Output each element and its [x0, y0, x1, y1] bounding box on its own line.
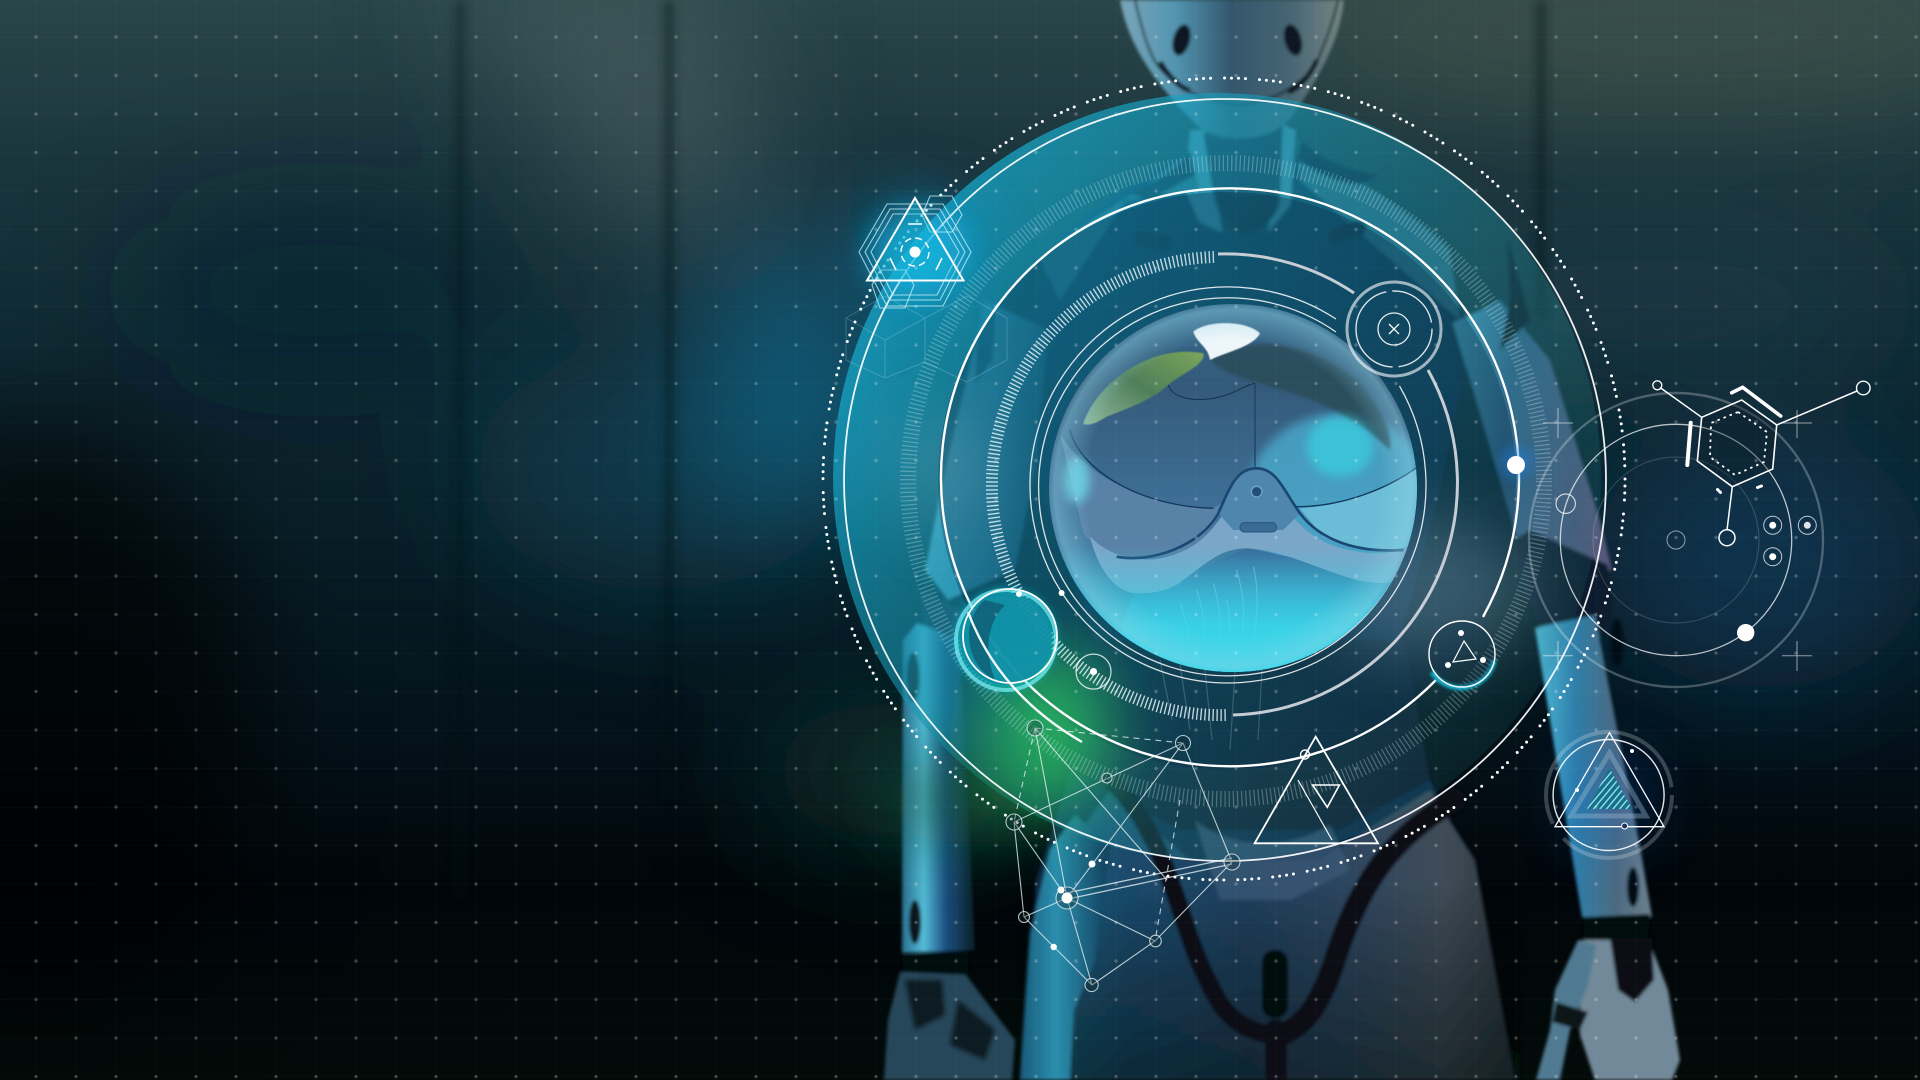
robot right upper arm: [1453, 300, 1612, 585]
right side light: [1248, 410, 1417, 558]
arc marker dots: [1016, 590, 1065, 597]
hexagon: [1697, 400, 1777, 487]
nose plate: [1218, 468, 1300, 530]
badge rings: [1546, 732, 1672, 858]
hexagons: [859, 196, 971, 308]
robot left forearm slots: [906, 652, 921, 944]
inner thin rings: [1030, 287, 1426, 683]
center target: [901, 238, 929, 266]
robot eyes: [1169, 22, 1305, 58]
robot belly slot: [1262, 950, 1288, 1018]
robot left thigh: [1020, 815, 1110, 1080]
robot jaw shadow: [1160, 60, 1317, 92]
large triangle icon: [1255, 737, 1378, 843]
nose dot: [1251, 486, 1262, 497]
robot left wrist: [903, 950, 968, 975]
robot right palm: [1610, 938, 1654, 1002]
robot shoulders: [1040, 140, 1460, 320]
robot belt plate: [1195, 820, 1350, 900]
inner ring shade: [938, 192, 1516, 770]
robot right forearm: [1535, 615, 1652, 917]
polar ice: [1193, 323, 1260, 360]
cyan cloud: [1307, 417, 1373, 477]
earth rim: [1049, 304, 1417, 672]
robot left forearm: [902, 623, 975, 953]
hair strands below globe: [1160, 660, 1262, 750]
robot left shoulder slot: [975, 257, 996, 385]
dotted ring: [823, 78, 1625, 880]
hatched triangle: [1587, 768, 1632, 809]
right triangle badge: [1546, 732, 1672, 858]
robot pelvis shade: [1020, 880, 1520, 1080]
small ring dot: [1076, 654, 1111, 689]
robot right thumb band: [1552, 1002, 1588, 1030]
robot head: [1120, 0, 1344, 138]
fur area: [1107, 548, 1417, 673]
network nodes: [1006, 720, 1240, 992]
robot neck lower: [1216, 190, 1280, 234]
mid triangle: [1571, 753, 1646, 816]
bright ring left: [956, 589, 1082, 742]
network bright dots: [1050, 860, 1096, 950]
robot left elbow: [920, 590, 1030, 690]
left lobe: [1060, 433, 1227, 559]
plus crosses: [1543, 408, 1812, 671]
robot straps: [1115, 785, 1455, 1080]
robot left upper arm: [925, 300, 1048, 600]
robot right elbow: [1505, 530, 1612, 650]
network constellation: [1006, 720, 1240, 992]
robot jaw line: [1135, 0, 1338, 105]
nose plate slot: [1240, 523, 1277, 532]
robot torso: [1020, 150, 1512, 1080]
dark land: [1210, 344, 1390, 450]
robot right shoulder slot: [1500, 240, 1530, 350]
tick marks: [890, 224, 942, 270]
double bonds: [1687, 423, 1691, 465]
robot right hand fingers: [1580, 938, 1680, 1080]
hex triangle icon: [859, 196, 971, 308]
earth globe: [1049, 304, 1433, 673]
white marker with blue glow: [1500, 445, 1534, 479]
badge dots: [1622, 823, 1628, 829]
robot chest dark patches: [1123, 140, 1378, 254]
lower light band: [1090, 516, 1407, 594]
triangle circle icon: [1429, 621, 1495, 688]
bottom glow: [1049, 304, 1417, 672]
faint cubes: [846, 296, 1007, 382]
molecule circles panel: [1529, 393, 1823, 687]
dark visor curve: [1117, 468, 1403, 558]
robot neck core: [1203, 125, 1283, 232]
target circle icon: [1347, 282, 1441, 376]
left lobe highlight: [1063, 457, 1090, 503]
robot figure: [884, 0, 1680, 1080]
robot pelvis: [1030, 790, 1515, 1080]
robot right wrist: [1583, 914, 1650, 940]
robot collar: [1185, 125, 1296, 232]
outer triangle: [1555, 733, 1664, 827]
helmet seams: [1070, 383, 1427, 508]
holographic disc: [833, 93, 1601, 861]
green land: [1083, 352, 1204, 425]
bonds: [1660, 388, 1857, 530]
small dashes: [1718, 486, 1762, 492]
middle white ring: [941, 188, 1519, 766]
colored glows: [870, 200, 1640, 845]
robot waist: [1070, 640, 1430, 830]
robot right thumb: [1536, 940, 1596, 1080]
tick ring: [908, 163, 1544, 799]
inner solid arcs: [1218, 254, 1457, 715]
end nodes: [1653, 381, 1662, 390]
robot left palm panel: [905, 980, 995, 1060]
triangle: [867, 198, 964, 280]
molecule: [1653, 381, 1870, 546]
robot left hand: [884, 972, 1015, 1080]
ring dots: [1764, 516, 1816, 566]
robot right forearm slots: [1611, 619, 1639, 907]
right lobe: [1300, 469, 1417, 549]
fur streaks: [1180, 566, 1258, 634]
inner dashed hexagon: [1710, 412, 1767, 475]
inner tick arc: [992, 257, 1228, 715]
coast line: [1168, 383, 1255, 399]
outer white ring: [844, 99, 1606, 861]
